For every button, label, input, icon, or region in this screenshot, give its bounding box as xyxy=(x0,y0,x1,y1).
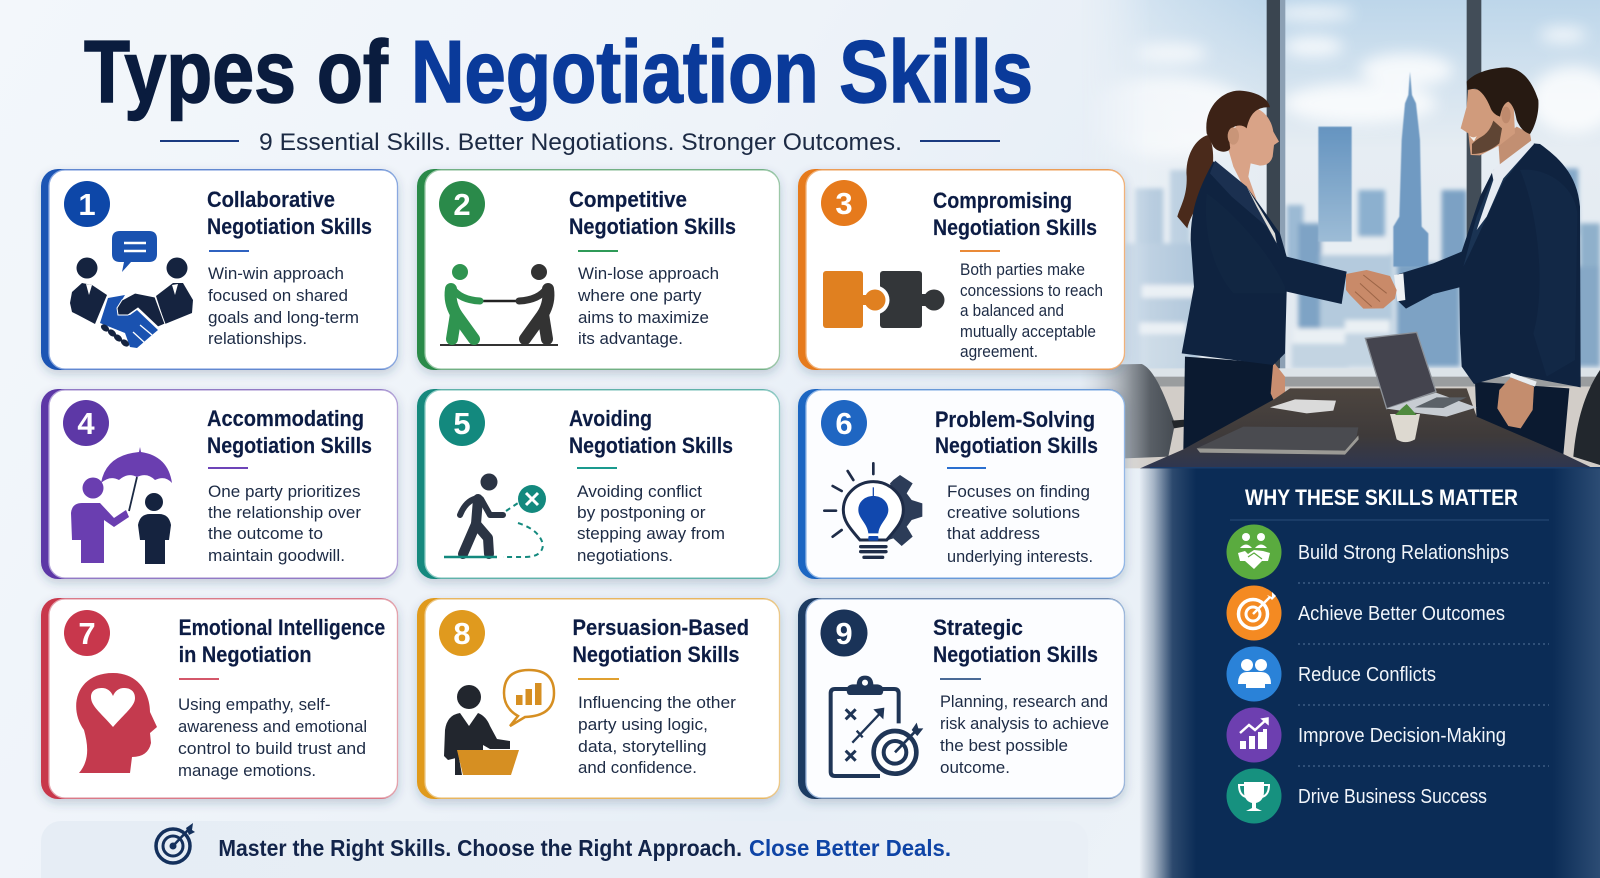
description: party using logic, xyxy=(578,715,708,734)
description: Win-lose approach xyxy=(578,264,719,283)
description: risk analysis to achieve xyxy=(940,714,1109,733)
item: build strong relationships: Build Strong Relationships xyxy=(1298,542,1509,564)
card frame xyxy=(41,598,398,799)
card frame xyxy=(798,169,1125,370)
number badge xyxy=(820,610,868,656)
description: a balanced and xyxy=(960,302,1064,320)
man xyxy=(1394,67,1581,455)
icon: clipboard plan and target xyxy=(831,676,923,776)
icon: light bulb and gear xyxy=(824,463,922,557)
heading: Accommodating xyxy=(207,406,364,431)
item: improve decision-making: Improve Decision-Making xyxy=(1298,725,1506,747)
description: awareness and emotional xyxy=(178,717,367,736)
panel background xyxy=(1120,468,1600,878)
description: control to build trust and xyxy=(178,739,366,758)
item: reduce conflicts: Reduce Conflicts xyxy=(1298,664,1436,686)
description: maintain goodwill. xyxy=(208,546,345,565)
title: Types of xyxy=(84,22,389,121)
description xyxy=(947,482,1093,566)
heading xyxy=(569,406,733,458)
heading: Strategic xyxy=(933,615,1023,640)
office chairs xyxy=(1080,364,1600,465)
number badge: 5 xyxy=(453,406,471,441)
description: Using empathy, self- xyxy=(178,695,330,714)
heading: Competitive xyxy=(569,187,687,212)
description xyxy=(940,692,1109,777)
description: aims to maximize xyxy=(578,308,709,327)
icon: head with heart xyxy=(76,673,157,773)
description: One party prioritizes xyxy=(208,482,360,501)
number badge: 1 xyxy=(78,187,96,222)
heading xyxy=(179,615,385,667)
number badge: 6 xyxy=(835,406,853,441)
icon: tug of war xyxy=(440,264,558,345)
icon: presenter with chart bubble xyxy=(444,670,554,775)
number badge xyxy=(439,610,485,656)
number badge xyxy=(821,180,867,226)
description: Focuses on finding xyxy=(947,482,1090,501)
description: Avoiding conflict xyxy=(577,482,702,501)
heading xyxy=(207,406,372,458)
description: where one party xyxy=(577,286,702,305)
number badge: 2 xyxy=(453,187,471,222)
description xyxy=(578,693,736,777)
number badge xyxy=(64,181,110,227)
icon: puzzle pieces xyxy=(823,271,944,328)
panel heading: WHY THESE SKILLS MATTER xyxy=(1245,485,1518,510)
item: achieve better outcomes xyxy=(1226,586,1505,640)
heading: Negotiation Skills xyxy=(933,215,1097,240)
description xyxy=(208,482,361,565)
description xyxy=(178,695,367,780)
description xyxy=(208,264,359,348)
card frame xyxy=(41,389,398,579)
card frame xyxy=(417,598,780,799)
description: outcome. xyxy=(940,758,1010,777)
banner text: Master the Right Skills. Choose the Right Approach. xyxy=(218,835,742,861)
heading: Negotiation Skills xyxy=(207,433,372,458)
card frame xyxy=(798,389,1125,579)
description: negotiations. xyxy=(577,546,673,565)
description: data, storytelling xyxy=(578,737,707,756)
heading: Avoiding xyxy=(569,406,652,431)
heading xyxy=(207,187,372,239)
heading: in Negotiation xyxy=(179,642,312,667)
description: Win-win approach xyxy=(208,264,344,283)
table, laptop, plant and folders xyxy=(1140,332,1593,468)
number badge xyxy=(439,181,485,227)
number badge xyxy=(63,400,109,446)
description: the relationship over xyxy=(208,503,361,522)
item: build strong relationships xyxy=(1226,524,1509,580)
icon: umbrella over person xyxy=(71,447,172,564)
icon: person walking away xyxy=(444,474,546,557)
description: that address xyxy=(947,524,1040,543)
banner: closing message xyxy=(41,821,1088,878)
description: agreement. xyxy=(960,343,1038,361)
description: and confidence. xyxy=(578,758,697,777)
title xyxy=(84,22,1033,121)
description: creative solutions xyxy=(947,503,1080,522)
description: Both parties make xyxy=(960,261,1085,279)
number badge: 4 xyxy=(77,406,95,441)
item: achieve better outcomes: Achieve Better Outcomes xyxy=(1298,603,1505,625)
panel: card 3 compromising xyxy=(798,169,1125,370)
icon: handshake with speech bubble xyxy=(70,231,193,348)
heading: Negotiation Skills xyxy=(572,642,740,667)
panel: card 1 collaborative xyxy=(41,169,398,370)
panel: card 9 strategic xyxy=(798,598,1125,799)
description: mutually acceptable xyxy=(960,323,1096,341)
description xyxy=(577,482,725,565)
heading: Negotiation Skills xyxy=(569,433,733,458)
item: improve decision-making xyxy=(1226,708,1506,762)
item: reduce conflicts xyxy=(1226,646,1436,702)
panel: card 2 competitive xyxy=(417,169,780,370)
number badge xyxy=(439,400,485,446)
card frame xyxy=(798,598,1125,799)
description: Planning, research and xyxy=(940,692,1108,711)
description: stepping away from xyxy=(577,524,725,543)
number badge xyxy=(821,400,867,446)
heading xyxy=(935,407,1098,458)
heading: Persuasion-Based xyxy=(572,615,749,640)
description: the best possible xyxy=(940,736,1068,755)
description: Influencing the other xyxy=(578,693,736,712)
number badge xyxy=(64,610,110,656)
subtitle: 9 Essential Skills. Better Negotiations. Stronger Outcomes. xyxy=(259,129,902,156)
heading: Problem-Solving xyxy=(935,407,1095,432)
description xyxy=(960,261,1103,361)
heading: Negotiation Skills xyxy=(207,214,372,239)
window sky and city skyline xyxy=(1116,0,1600,368)
title: Negotiation Skills xyxy=(411,22,1033,121)
panel: card 6 problem-solving xyxy=(798,389,1125,579)
panel: card 4 accommodating xyxy=(41,389,398,579)
heading xyxy=(933,188,1097,240)
card frame xyxy=(417,169,780,370)
number badge: 7 xyxy=(78,616,96,651)
panel: card 5 avoiding xyxy=(417,389,780,579)
number badge: 9 xyxy=(835,616,853,651)
description: underlying interests. xyxy=(947,547,1093,566)
description: its advantage. xyxy=(578,329,683,348)
card frame xyxy=(417,389,780,579)
window frames xyxy=(1080,0,1600,468)
heading: Negotiation Skills xyxy=(569,214,736,239)
description: goals and long-term xyxy=(208,308,359,327)
item: drive business success xyxy=(1226,768,1487,824)
panel: why these skills matter xyxy=(1120,467,1600,878)
card frame xyxy=(41,169,398,370)
description: the outcome to xyxy=(208,524,323,543)
panel: card 8 persuasion-based xyxy=(417,598,780,799)
number badge: 3 xyxy=(835,186,853,221)
heading: Negotiation Skills xyxy=(935,433,1098,458)
description: focused on shared xyxy=(208,286,348,305)
banner background xyxy=(41,821,1088,878)
number badge: 8 xyxy=(453,616,471,651)
description: relationships. xyxy=(208,329,307,348)
woman xyxy=(1177,91,1397,449)
heading: Negotiation Skills xyxy=(933,642,1098,667)
description: concessions to reach xyxy=(960,282,1103,300)
heading: Collaborative xyxy=(207,187,335,212)
heading xyxy=(933,615,1098,667)
description xyxy=(577,264,719,348)
heading: Emotional Intelligence xyxy=(179,615,385,640)
heading xyxy=(569,187,736,239)
description: by postponing or xyxy=(577,503,706,522)
heading xyxy=(572,615,749,667)
description: manage emotions. xyxy=(178,761,316,780)
banner: closing message: Close Better Deals. xyxy=(749,835,951,861)
panel: card 7 emotional intelligence xyxy=(41,598,398,799)
item: drive business success: Drive Business Success xyxy=(1298,786,1487,808)
heading: Compromising xyxy=(933,188,1072,213)
photo: two business people shaking hands in an office xyxy=(1050,0,1600,468)
icon: target xyxy=(156,823,195,863)
